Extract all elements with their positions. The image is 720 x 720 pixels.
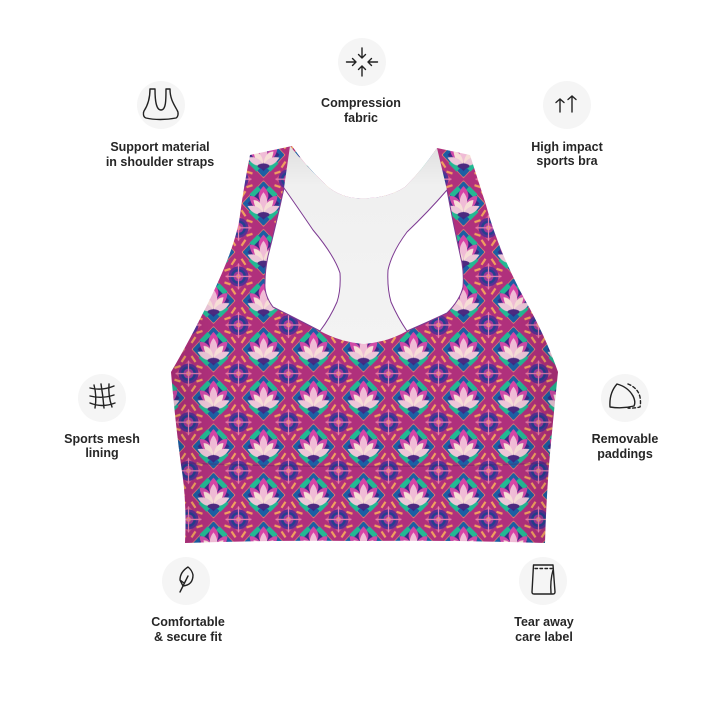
feature: comfortable fit: & secure fit [154,630,223,644]
label: Support material [110,140,210,154]
label: Compression [321,96,401,110]
feature: compression fabric [321,38,401,125]
label: High impact [531,140,604,154]
feature: comfortable fit [151,557,225,644]
feature: tear away label: care label [515,630,573,644]
bra shading [171,146,558,543]
left armhole cutout [265,188,340,331]
right armhole cutout [388,190,463,331]
icon: mesh grid [78,374,126,422]
feature: removable paddings [592,374,658,461]
feature: high impact [531,81,604,168]
feature: high impact: sports bra [536,154,599,168]
icon: inward arrows [338,38,386,86]
icon: feather [162,557,210,605]
feature: compression fabric: fabric [344,111,378,125]
icon: padding shapes [601,374,649,422]
icon: up arrows [543,81,591,129]
bra body with lotus print [171,146,558,543]
label: Comfortable [151,615,225,629]
feature: removable paddings: paddings [597,447,653,461]
feature: sports mesh: lining [85,446,119,460]
icon: care label bag [519,557,567,605]
label: Tear away [514,615,574,629]
icon: shoulder straps bra [137,81,185,129]
feature: support material [106,81,214,169]
label: Sports mesh [64,432,140,446]
feature: tear away label [514,557,574,644]
label: Removable [592,432,658,446]
sports bra product [171,146,558,543]
feature: sports mesh [64,374,140,460]
feature: support material: in shoulder straps [106,155,214,169]
bra inner lining [284,146,447,344]
hem seam [181,463,549,466]
